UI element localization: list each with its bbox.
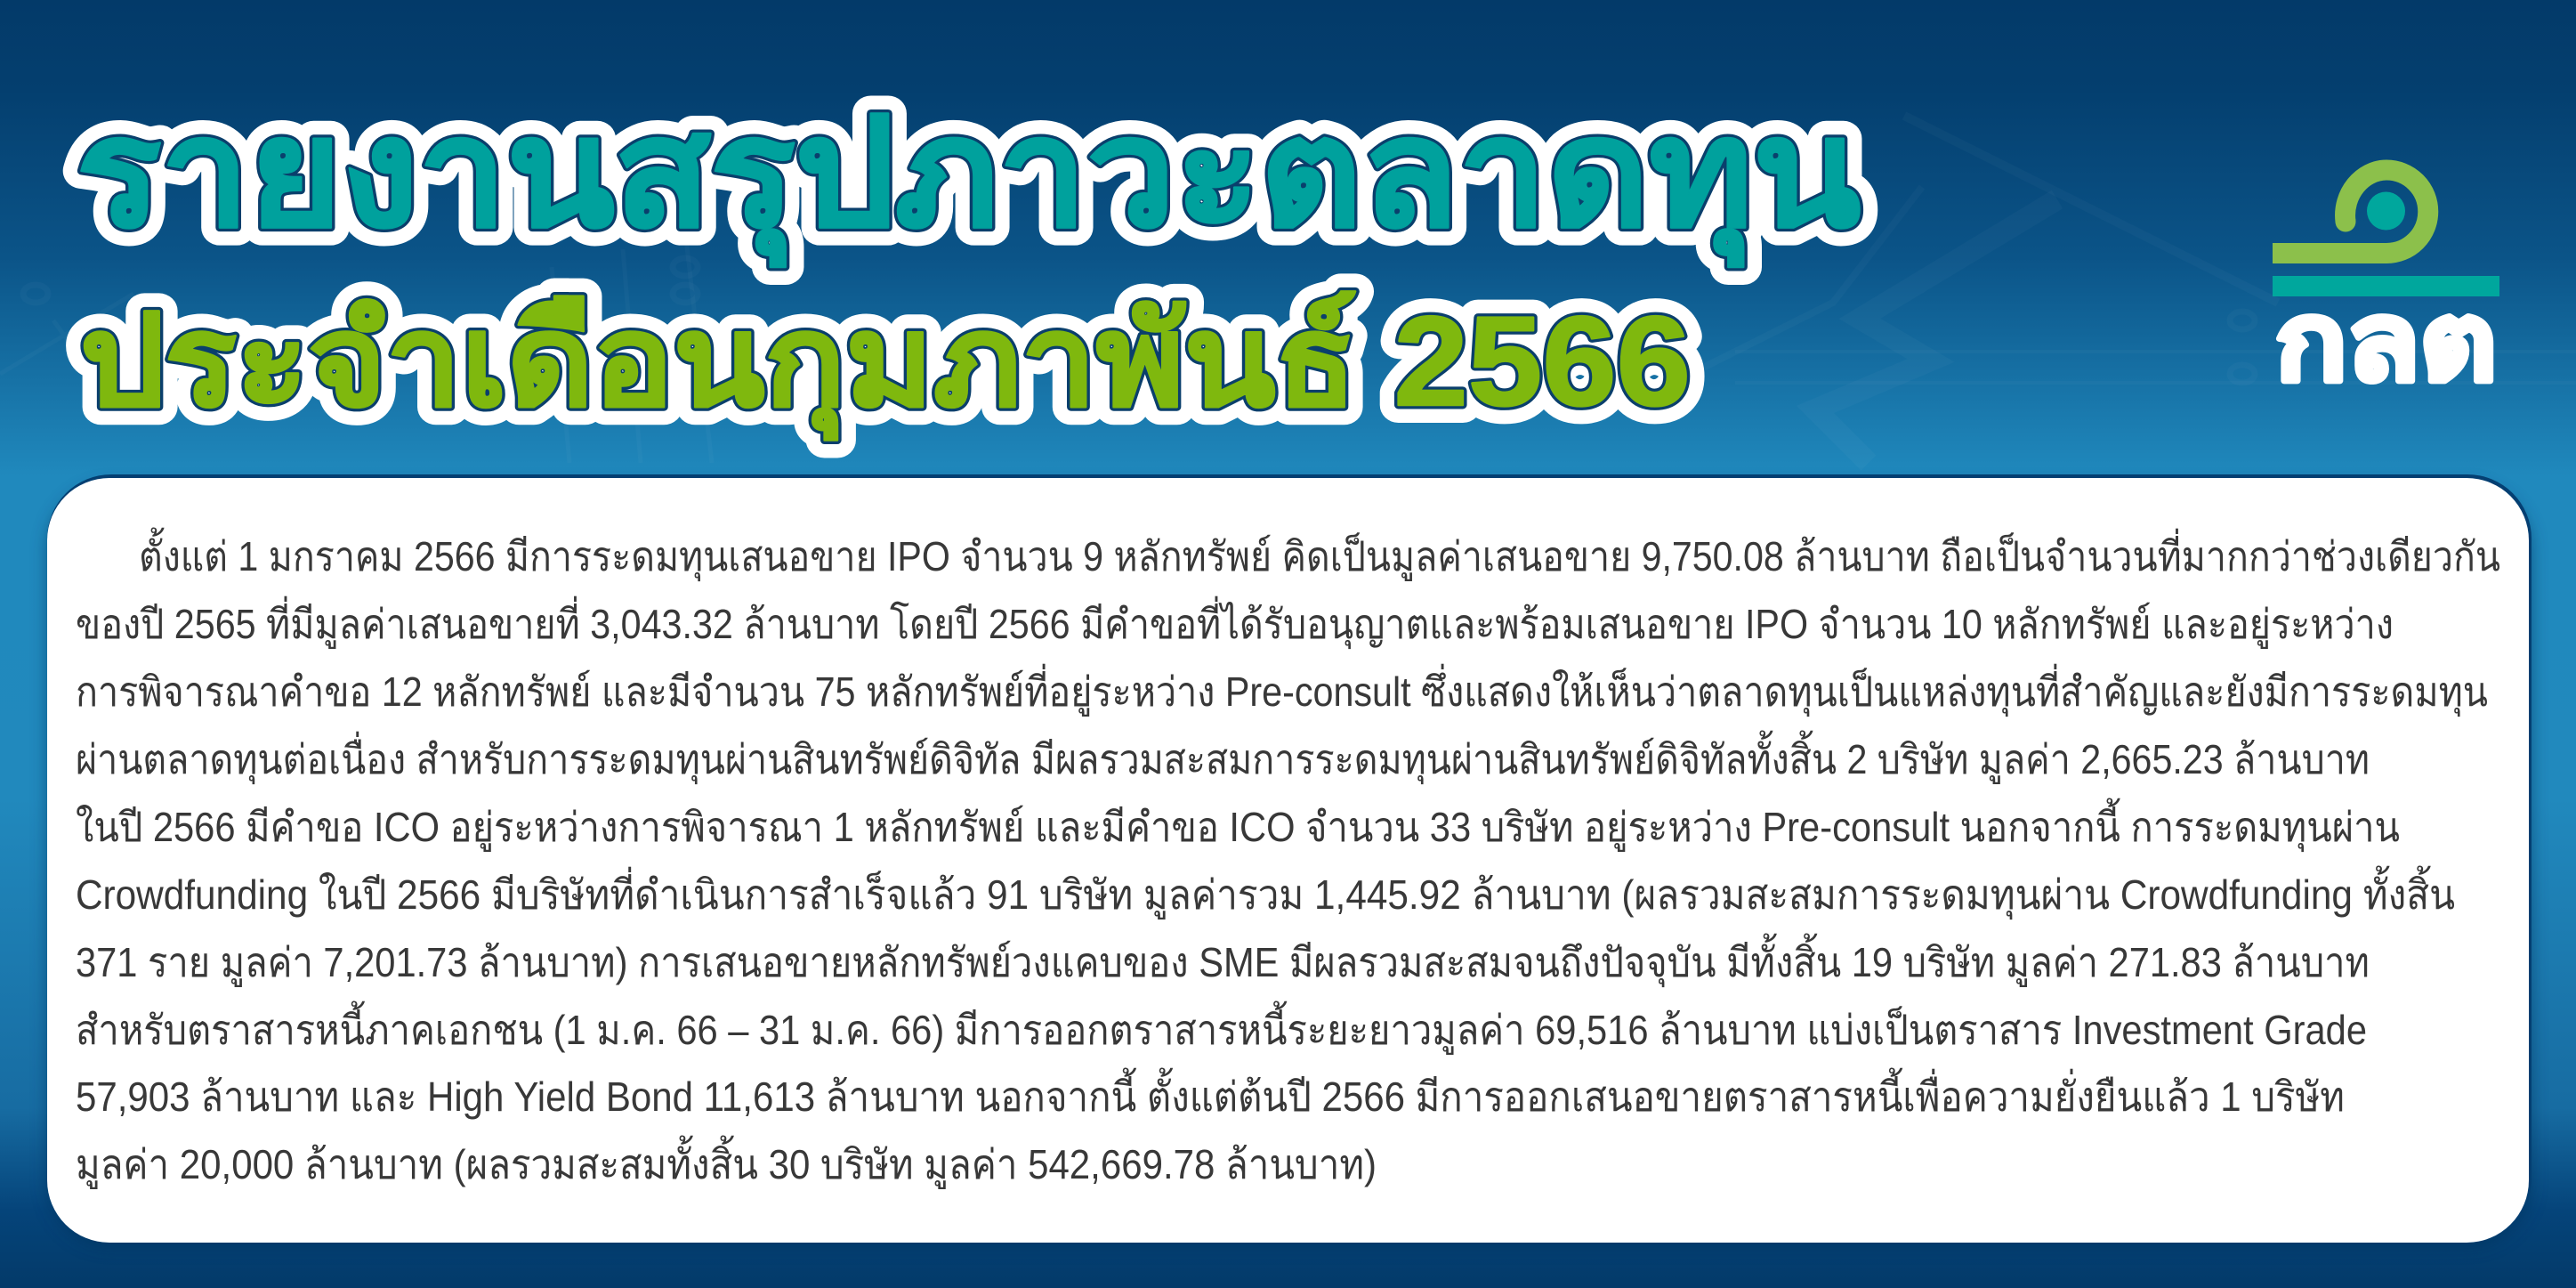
- panel shadow: [47, 485, 2532, 1247]
- title line 2: ประจำเดือนกุมภาพันธ์ 2566: [80, 291, 1691, 441]
- text block: market summary: ผ่านตลาดทุนต่อเนื่อง สำหรับการระดมทุนผ่านสินทรัพย์ดิจิทัล มีผลรวมสะสมการระดมทุนผ่านสินทรัพย์ดิจิทัลทั้งสิ้น 2 บริษัท มูลค่า 2,665.23 ล้านบาท: [76, 730, 2370, 785]
- icon: SEC logo: [2273, 170, 2499, 402]
- title line 2: ประจำเดือนกุมภาพันธ์ 2566: [80, 291, 1691, 441]
- text block: market summary: 371 ราย มูลค่า 7,201.73 ล้านบาท) การเสนอขายหลักทรัพย์วงแคบของ SME มีผลรวมสะสมจนถึงปัจจุบัน มีทั้งสิ้น 19 บริษัท มูลค่า 271.83 ล้านบาท: [76, 933, 2370, 988]
- title line 1: รายงานสรุปภาวะตลาดทุน: [77, 89, 1861, 267]
- background circuit pattern: [0, 116, 2576, 463]
- text block: market summary: 57,903 ล้านบาท และ High Yield Bond 11,613 ล้านบาท นอกจากนี้ ตั้งแต่ต้นปี 2566 มีการออกเสนอขายตราสารหนี้เพื่อความยั่งยืนแล้ว 1 บริษัท: [76, 1067, 2345, 1120]
- icon: SEC logo: กลต: [2275, 281, 2497, 402]
- title line 1: รายงานสรุปภาวะตลาดทุน: [77, 89, 1861, 267]
- title line 2: ประจำเดือนกุมภาพันธ์ 2566: [80, 291, 1691, 441]
- text block: market summary: [76, 527, 2500, 1189]
- text block: market summary: มูลค่า 20,000 ล้านบาท (ผลรวมสะสมทั้งสิ้น 30 บริษัท มูลค่า 542,669.78 ล้านบาท): [76, 1135, 1377, 1189]
- text block: market summary: ในปี 2566 มีคำขอ ICO อยู่ระหว่างการพิจารณา 1 หลักทรัพย์ และมีคำขอ ICO จำนวน 33 บริษัท อยู่ระหว่าง Pre-consult นอกจากนี้ การระดมทุนผ่าน: [76, 798, 2400, 853]
- text block: market summary: สำหรับตราสารหนี้ภาคเอกชน (1 ม.ค. 66 – 31 ม.ค. 66) มีการออกตราสารหนี้ระยะยาวมูลค่า 69,516 ล้านบาท แบ่งเป็นตราสาร Investment Grade: [76, 1000, 2367, 1055]
- title line 1: รายงานสรุปภาวะตลาดทุน: [77, 89, 1861, 267]
- panel: summary: [47, 474, 2532, 1243]
